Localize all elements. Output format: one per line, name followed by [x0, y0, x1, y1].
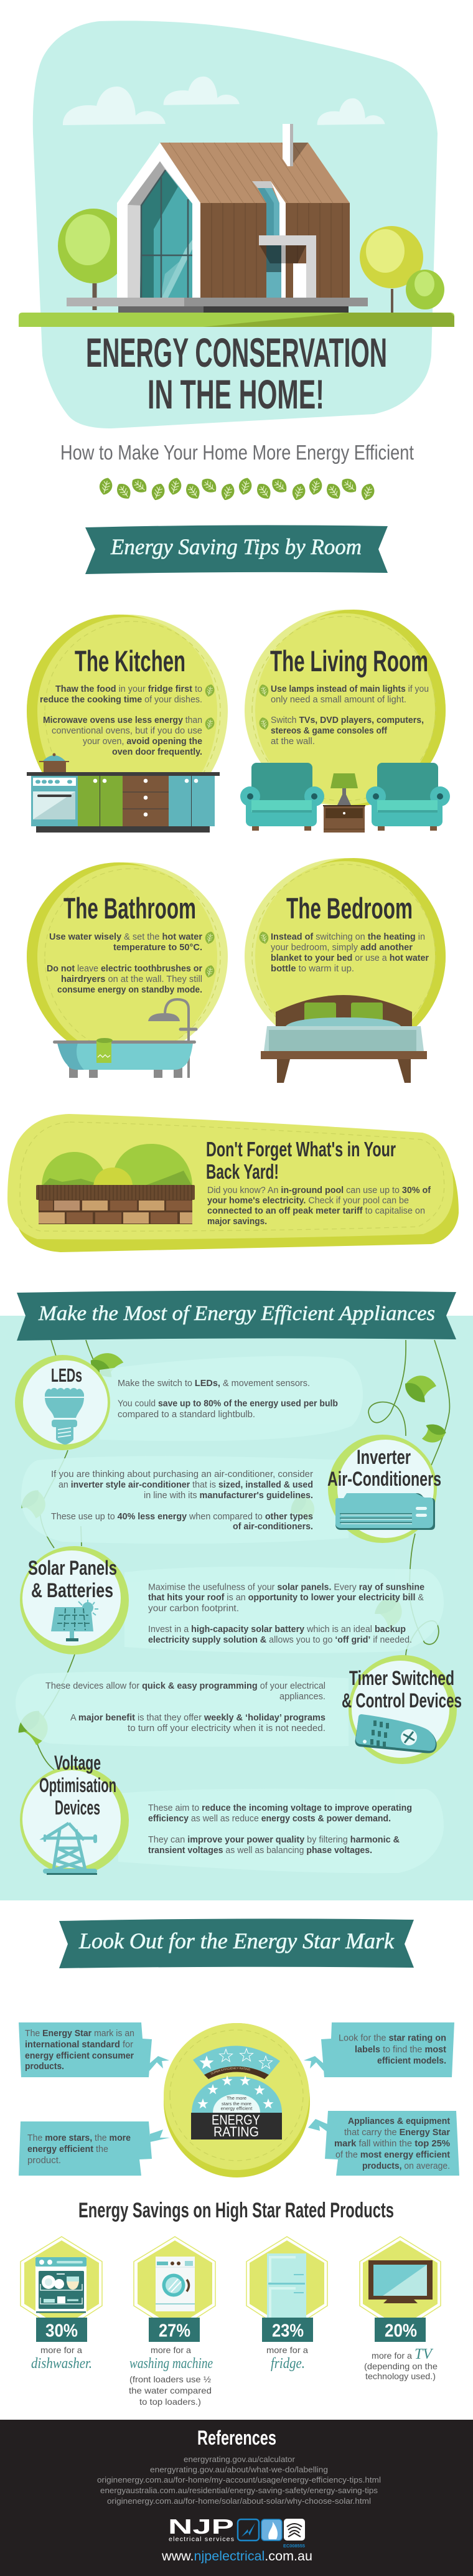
- percentage: [375, 2318, 426, 2342]
- panel: LEDs: LEDs: [51, 1364, 82, 1386]
- LED text: compared to a standard lightbulb.: [118, 1409, 255, 1420]
- callout: star rating labels: [304, 2022, 454, 2077]
- bedroom tips: Instead of switching on the heating in: [271, 932, 425, 942]
- solar text: electricity supply solution & allows you to go ‘off grid’ if needed.: [148, 1635, 412, 1645]
- back yard text: major savings.: [207, 1216, 267, 1227]
- bathroom tips: hairdryers on at the wall. They still: [61, 974, 202, 984]
- solar text: that hits your roof is an opportunity to lower your electricity bill &: [148, 1592, 424, 1603]
- air conditioner text: an inverter style air-conditioner that is sized, installed & used: [59, 1479, 313, 1490]
- voltage text: [148, 1803, 412, 1856]
- callout: top 25 percent: of the most energy efficient: [335, 2149, 450, 2160]
- NJP logo: NJP: [168, 2515, 234, 2538]
- percentage: 20%: [385, 2321, 417, 2341]
- bedroom tips: [258, 930, 429, 974]
- star fan: SUPER EFFICIENCY RATING: [210, 2067, 250, 2075]
- energy rating label: RATING: [213, 2124, 259, 2140]
- trees: [58, 209, 444, 313]
- solar text: Maximise the usefulness of your solar panels. Every ray of sunshine: [148, 1582, 424, 1593]
- LED text: Make the switch to LEDs, & movement sensors.: [118, 1378, 310, 1389]
- house base and ground: [19, 298, 454, 327]
- mint background: [0, 1316, 473, 1900]
- voltage text: They can improve your power quality by filtering harmonic &: [148, 1834, 400, 1845]
- callout: top 25 percent: mark fall within the top 25%: [334, 2138, 450, 2149]
- callout: more stars: product.: [27, 2155, 61, 2166]
- caption: the water compared: [129, 2385, 212, 2395]
- leaf garland: [98, 475, 377, 502]
- timer text: These devices allow for quick & easy programming of your electrical: [45, 1681, 325, 1691]
- badge caption: energy efficient: [221, 2106, 253, 2111]
- vine leaves: [19, 1353, 448, 1745]
- website: www.njpelectrical.com.au: [161, 2549, 312, 2564]
- back yard text: [207, 1185, 431, 1227]
- panel: inverter air-conditioners: Inverter: [357, 1446, 411, 1468]
- badge caption: [221, 2095, 253, 2111]
- living room tips: Switch TVs, DVD players, computers,: [271, 715, 424, 725]
- energy rating label: [191, 2112, 282, 2140]
- icon: pylon: [43, 1823, 97, 1875]
- panel: voltage optimisation devices: Optimisation: [39, 1774, 116, 1796]
- house: [117, 124, 350, 298]
- living room tips: [258, 683, 429, 747]
- bedroom egg background: [245, 858, 446, 1052]
- callout: energy star standard: [19, 2022, 169, 2077]
- timer text: appliances.: [279, 1691, 325, 1702]
- footer: [0, 2420, 473, 2576]
- title: [86, 329, 387, 417]
- icon: solar panel: [51, 1600, 98, 1641]
- callout: star rating labels: labels to find the most: [355, 2044, 446, 2055]
- star fan: [192, 2046, 282, 2113]
- timer text: to turn off your electricity when it is not needed.: [128, 1723, 325, 1734]
- caption: (front loaders use ½: [129, 2374, 211, 2384]
- hexagon: [246, 2237, 327, 2332]
- back yard heading: [206, 1138, 396, 1183]
- caption: [266, 2345, 308, 2372]
- percentage: 30%: [45, 2321, 78, 2341]
- air conditioner text: [51, 1469, 313, 1532]
- percentage: 27%: [159, 2321, 190, 2341]
- badge egg: [164, 2023, 310, 2177]
- living room tips: only need a small amount of light.: [271, 694, 406, 705]
- living room tips: stereos & game consoles off: [271, 725, 388, 736]
- callout: top 25 percent: [308, 2111, 459, 2176]
- vines and leaves: [37, 1340, 449, 1770]
- kitchen egg background: [27, 615, 228, 823]
- caption: more for a: [372, 2351, 412, 2361]
- kitchen illustration: [27, 753, 220, 833]
- caption: [129, 2345, 213, 2407]
- air conditioner badge: [328, 1435, 437, 1543]
- panel: the bedroom: [245, 858, 446, 1083]
- banner: energy saving tips by room: [85, 525, 388, 574]
- panel: LEDs: [15, 1355, 338, 1450]
- section: energy efficient appliances: [0, 1291, 473, 1900]
- panel: solar panels and batteries: Solar Panels: [28, 1557, 117, 1579]
- bed: [261, 995, 427, 1083]
- voltage text: transient voltages as well as balancing phase voltages.: [148, 1845, 372, 1856]
- bathroom tips: Do not leave electric toothbrushes or: [47, 963, 202, 974]
- NJP logo: [168, 2515, 305, 2549]
- percentage: [149, 2318, 200, 2342]
- back yard text: Did you know? An in-ground pool can use up to 30% of: [207, 1185, 431, 1196]
- icon: television: [368, 2260, 433, 2303]
- banner: make the most of appliances: Make the Most of Energy Efficient Appliances: [38, 1302, 435, 1325]
- back yard text: connected to an off peak meter tariff to capitalise on: [207, 1205, 425, 1216]
- callout: more stars: energy efficient the: [27, 2144, 108, 2154]
- kitchen tips: [40, 683, 216, 757]
- energy rating badge: [164, 2023, 310, 2177]
- icon: LED bulb: [45, 1388, 84, 1445]
- caption: more for a: [151, 2345, 191, 2355]
- armchairs and lamp: [240, 763, 450, 833]
- caption: more for a: [266, 2345, 308, 2355]
- bathroom egg background: [27, 862, 228, 1059]
- references list: energyaustralia.com.au/residential/energy-saving-safety/energy-saving-tips: [100, 2486, 378, 2495]
- timer text: [45, 1681, 325, 1734]
- icon: remote control: [355, 1714, 437, 1753]
- caption: technology used.): [365, 2371, 436, 2381]
- callout: more stars: The more stars, the more: [27, 2133, 131, 2143]
- caption: washing machine: [129, 2356, 213, 2372]
- icon: air conditioner: [335, 1493, 435, 1530]
- bedroom tips: your bedroom, simply add another: [271, 942, 413, 953]
- solar badge: [20, 1546, 129, 1654]
- bedroom tips: blanket to your bed or use a hot water: [271, 953, 429, 963]
- text blobs: [16, 1356, 444, 1873]
- callout: top 25 percent: Appliances & equipment: [348, 2116, 450, 2126]
- panel: the kitchen: [27, 615, 228, 833]
- caption: dishwasher.: [31, 2356, 92, 2372]
- solar text: your carbon footprint.: [148, 1603, 239, 1614]
- icon: fridge: [267, 2253, 306, 2318]
- references list: originenergy.com.au/for-home/my-account/usage/energy-efficiency-tips.html: [97, 2475, 381, 2484]
- clouds: [63, 77, 385, 125]
- LED text: You could save up to 80% of the energy used per bulb: [118, 1399, 338, 1408]
- back yard heading: Don't Forget What's in Your: [206, 1138, 396, 1161]
- panel: voltage optimisation devices: [20, 1752, 412, 1875]
- callout: energy star standard: international standard for: [25, 2039, 133, 2050]
- NJP logo: EC008555: [283, 2544, 305, 2549]
- banner: make the most of appliances: [17, 1291, 456, 1341]
- banner: energy saving tips by room: Energy Saving Tips by Room: [110, 534, 362, 559]
- caption: fridge.: [271, 2356, 305, 2372]
- title: IN THE HOME!: [148, 371, 324, 417]
- caption: [31, 2345, 92, 2372]
- product: washing machine: [129, 2237, 215, 2407]
- voltage text: efficiency as well as reduce energy costs & power demand.: [148, 1813, 391, 1824]
- bathroom tips: [47, 930, 216, 995]
- bathroom tips: Use water wisely & set the hot water: [49, 932, 202, 942]
- hexagon: [21, 2237, 102, 2332]
- panel: inverter air-conditioners: [51, 1435, 441, 1543]
- back yard text: your home's electricity. Check if your pool can be: [207, 1196, 409, 1205]
- icon: washing machine: [156, 2257, 195, 2311]
- living room tips: Use lamps instead of main lights if you: [271, 684, 429, 694]
- banner: look out for the energy star mark: Look Out for the Energy Star Mark: [78, 1928, 395, 1953]
- banner: look out for the energy star mark: [59, 1918, 414, 1968]
- bathtub and shower: [53, 999, 196, 1078]
- callout: energy star standard: products.: [25, 2061, 64, 2072]
- hedge and brick wall: [36, 1144, 195, 1224]
- references list: [97, 2455, 381, 2506]
- bedroom tips: bottle to warm it up.: [271, 963, 354, 974]
- references heading: References: [197, 2427, 276, 2449]
- percentage: [262, 2318, 313, 2342]
- air conditioner text: of air-conditioners.: [233, 1521, 313, 1532]
- hero background blob: [33, 21, 438, 428]
- percentage: [36, 2318, 87, 2342]
- callout: energy star standard: energy efficient consumer: [25, 2050, 134, 2061]
- product: fridge: [246, 2237, 327, 2372]
- bathroom tips: consume energy on standby mode.: [57, 984, 202, 995]
- air conditioner text: If you are thinking about purchasing an air-conditioner, consider: [51, 1469, 313, 1479]
- callout: energy star standard: The Energy Star mark is an: [25, 2028, 134, 2039]
- panel: solar panels and batteries: & Batteries: [31, 1579, 113, 1602]
- badge caption: The more: [227, 2095, 246, 2101]
- kitchen tips: Microwave ovens use less energy than: [43, 715, 202, 725]
- NJP logo: electrical services: [169, 2536, 234, 2543]
- caption: more for a: [40, 2345, 82, 2355]
- kitchen tips: Thaw the food in your fridge first to: [55, 684, 202, 694]
- living room egg background: [245, 610, 446, 806]
- back yard heading: Back Yard!: [206, 1160, 279, 1183]
- panel: solar panels and batteries: [20, 1546, 424, 1654]
- air conditioner text: These use up to 40% less energy when compared to other types: [51, 1511, 313, 1522]
- bedroom heading: The Bedroom: [286, 892, 413, 925]
- references list: energyrating.gov.au/about/what-we-do/labelling: [150, 2465, 328, 2475]
- panel: voltage optimisation devices: Devices: [55, 1796, 100, 1819]
- icon: dishwasher: [35, 2257, 87, 2313]
- caption: (depending on the: [364, 2361, 438, 2371]
- product: dishwasher: [21, 2237, 102, 2372]
- callout: more stars: [19, 2121, 170, 2176]
- references list: energyrating.gov.au/calculator: [184, 2455, 296, 2464]
- LED text: [118, 1378, 338, 1420]
- product: TV: [360, 2237, 441, 2381]
- kitchen tips: oven door frequently.: [112, 747, 202, 757]
- hero illustration: [19, 21, 454, 428]
- caption: TV: [414, 2346, 433, 2362]
- hexagon: [134, 2237, 215, 2332]
- callout: star rating labels: Look for the star rating on: [339, 2032, 446, 2044]
- kitchen tips: your oven, avoid opening the: [83, 736, 202, 747]
- solar text: Invest in a high-capacity solar battery which is an ideal backup: [148, 1624, 406, 1635]
- hexagon: [360, 2237, 441, 2332]
- solar text: [148, 1582, 424, 1645]
- caption: [364, 2346, 438, 2381]
- kitchen tips: reduce the cooking time of your dishes.: [40, 694, 202, 705]
- voltage text: These aim to reduce the incoming voltage to improve operating: [148, 1803, 412, 1813]
- callout: top 25 percent: that carry the Energy Star: [344, 2127, 450, 2138]
- back yard blob: [7, 1114, 459, 1252]
- panel: timer switched and control devices: [45, 1655, 462, 1764]
- energy rating label: ENERGY: [212, 2112, 260, 2128]
- panel: back yard: [7, 1114, 459, 1252]
- panel: the bathroom: [27, 862, 228, 1078]
- panel: the living room: [240, 610, 450, 833]
- bathroom tips: temperature to 50°C.: [113, 942, 202, 953]
- voltage badge: [20, 1766, 129, 1875]
- callout: star rating labels: efficient models.: [377, 2055, 446, 2066]
- bathroom heading: The Bathroom: [63, 892, 196, 925]
- kitchen tips: conventional ovens, but if you do use: [52, 725, 202, 736]
- percentage: 23%: [272, 2321, 304, 2341]
- kitchen heading: The Kitchen: [75, 644, 185, 677]
- timer text: A major benefit is that they offer weekly & ‘holiday’ programs: [70, 1712, 325, 1723]
- callout: top 25 percent: products, on average.: [362, 2161, 450, 2171]
- LED badge: [15, 1355, 110, 1450]
- caption: to top loaders.): [139, 2397, 201, 2407]
- timer badge: [349, 1655, 457, 1764]
- living room tips: at the wall.: [271, 736, 315, 747]
- references list: originenergy.com.au/for-home/solar/about-solar/why-choose-solar.html: [107, 2496, 371, 2506]
- badge caption: stars the more: [222, 2101, 251, 2107]
- panel: voltage optimisation devices: Voltage: [54, 1752, 101, 1774]
- footer background: [0, 2420, 473, 2576]
- air conditioner text: in line with its manufacturer's guidelines.: [144, 1490, 313, 1501]
